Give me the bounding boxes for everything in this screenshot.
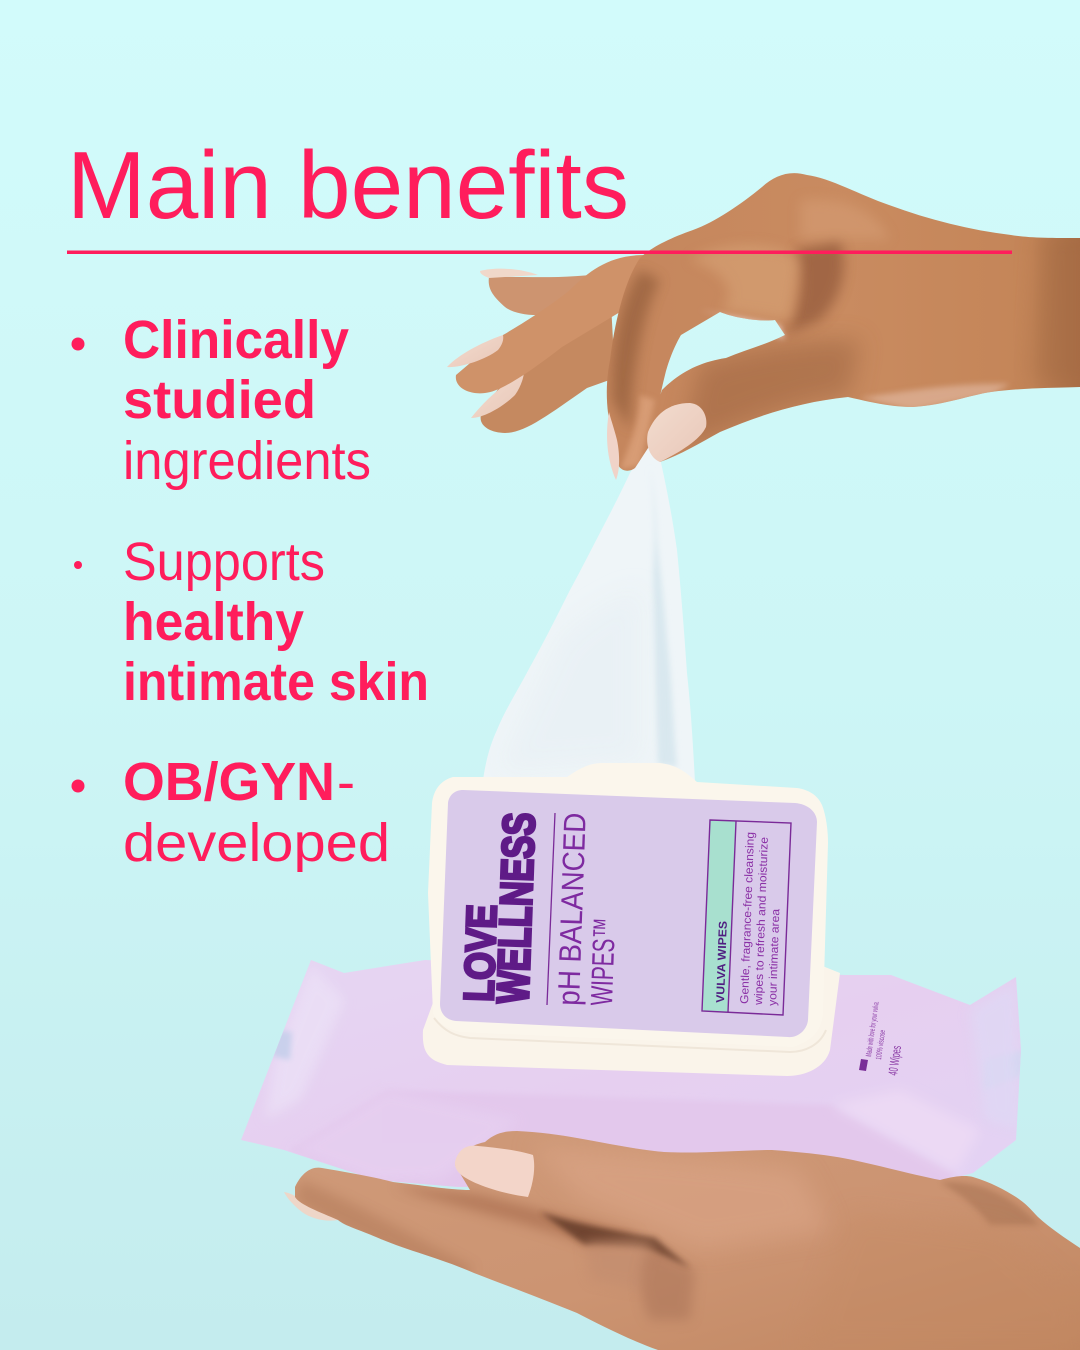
benefit: clinically studied ingredients: Clinically xyxy=(123,310,349,370)
header divider xyxy=(67,250,1012,254)
benefit: supports healthy intimate skin: intimate skin xyxy=(123,652,429,712)
product name: WIPES™ xyxy=(584,917,622,1006)
second finger xyxy=(456,255,645,393)
product name: pH BALANCED xyxy=(551,812,593,1006)
wipes package xyxy=(241,960,1022,1190)
fingertip nail xyxy=(284,1192,338,1221)
dispenser flap xyxy=(428,763,828,1047)
package small print: 40 Wipes xyxy=(885,1044,904,1076)
benefit: ob/gyn-developed: developed xyxy=(123,813,390,873)
brand logo: WELLNESS xyxy=(487,812,545,1004)
benefits list xyxy=(72,310,429,873)
package shading xyxy=(265,965,1022,1190)
wipe cloth xyxy=(484,448,695,780)
cloth body xyxy=(484,448,695,780)
brand logo xyxy=(455,812,545,1004)
info box: VULVA WIPES xyxy=(715,920,730,1003)
brand logo: LOVE xyxy=(455,904,505,1002)
benefit: supports healthy intimate skin: Supports xyxy=(123,532,325,592)
benefit: clinically studied ingredients: studied xyxy=(123,370,316,430)
package small print xyxy=(859,1001,904,1076)
third finger xyxy=(481,285,615,433)
second finger nail xyxy=(447,335,503,367)
package small print: 100% viscose xyxy=(874,1029,887,1060)
info box xyxy=(702,820,791,1015)
dispenser base tray xyxy=(423,965,840,1076)
back finger nail xyxy=(480,269,538,278)
thumb nail xyxy=(455,1146,534,1197)
product name xyxy=(551,812,622,1006)
bottom hand holding package xyxy=(284,1131,1080,1350)
package small print: Made with love for your vulva. xyxy=(864,1001,881,1057)
benefit: supports healthy intimate skin: healthy xyxy=(123,592,304,652)
benefit: ob/gyn-developed xyxy=(72,752,390,873)
benefit: supports healthy intimate skin xyxy=(74,532,429,712)
benefit: ob/gyn-developed: OB/GYN xyxy=(123,752,335,812)
cloth fold shadow xyxy=(652,542,678,766)
top hand pinching wipe xyxy=(447,173,1080,480)
benefit: clinically studied ingredients xyxy=(72,310,371,491)
third finger nail xyxy=(471,373,524,418)
benefit: ob/gyn-developed: - xyxy=(337,752,355,812)
dispenser lid xyxy=(423,763,840,1076)
product label xyxy=(440,790,817,1037)
package body xyxy=(241,960,1021,1187)
index finger nail edge xyxy=(607,412,619,480)
palm, wrist, index finger and thumb xyxy=(607,173,1080,471)
benefit: clinically studied ingredients: ingredients xyxy=(123,431,371,491)
hand shading xyxy=(612,199,1080,470)
title: Main benefits xyxy=(67,132,629,239)
info box: your intimate area xyxy=(767,908,782,1006)
back finger xyxy=(489,272,645,315)
logo rule xyxy=(547,813,555,1005)
hand xyxy=(295,1131,1080,1350)
info box: Gentle, fragrance-free cleansing xyxy=(739,832,757,1004)
thumb nail xyxy=(647,403,706,462)
hand shading xyxy=(296,1157,1036,1320)
info box: wipes to refresh and moisturize xyxy=(753,837,771,1006)
